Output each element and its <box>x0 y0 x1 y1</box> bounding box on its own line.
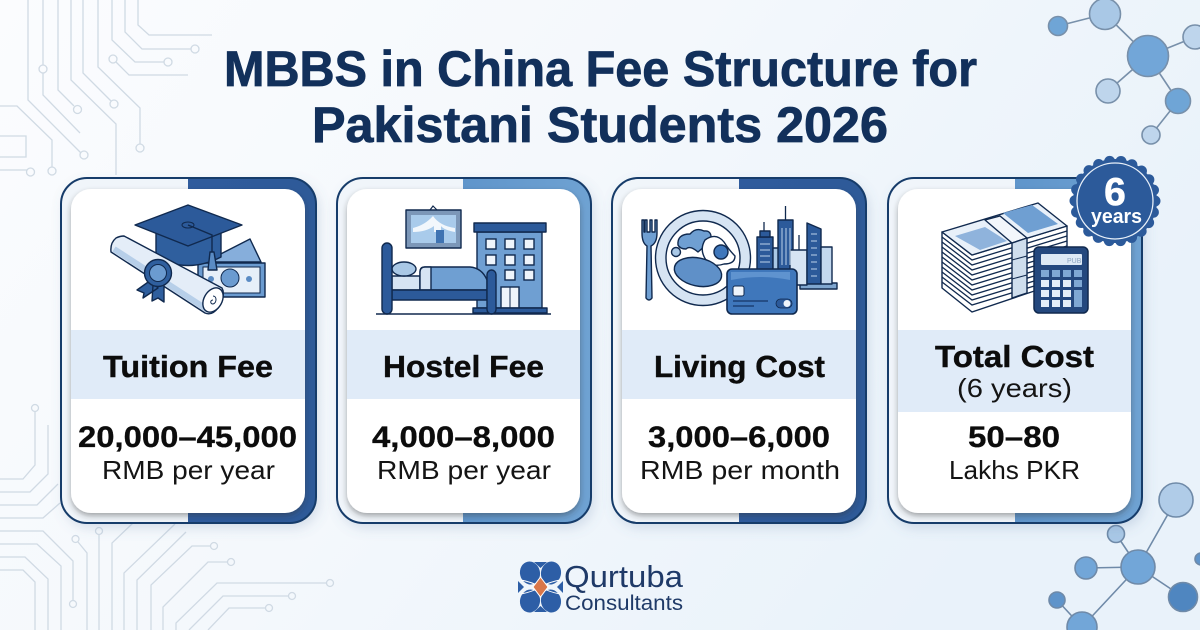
amount: tuition fee: 20,000–45,000 <box>78 421 297 454</box>
unit: total cost: Lakhs PKR <box>949 455 1080 485</box>
icon: graduation cap, diploma and money <box>111 205 265 316</box>
badge: 6 years: years <box>1091 206 1142 228</box>
amount: hostel fee: 4,000–8,000 <box>372 421 555 454</box>
molecule network: top right <box>1048 0 1200 144</box>
logo: Qurtuba Consultants <box>518 559 684 615</box>
icon: banknote stack and calculator: PUB <box>1067 258 1082 265</box>
icon: bed, picture and building <box>376 206 551 314</box>
icon: banknote stack and calculator <box>942 203 1088 313</box>
title <box>224 41 977 153</box>
panel: tuition fee <box>61 178 316 523</box>
band: total cost <box>898 330 1131 412</box>
wordmark: Qurtuba: Qurtuba <box>564 559 684 594</box>
label: tuition fee: Tuition Fee <box>103 349 273 384</box>
amount: living cost: 3,000–6,000 <box>648 421 830 454</box>
panel: hostel fee <box>337 178 591 523</box>
title: Pakistani Students 2026 <box>312 97 888 153</box>
band: tuition fee <box>71 330 305 399</box>
badge: 6 years <box>1073 159 1157 243</box>
label: total cost: Total Cost <box>935 339 1094 374</box>
label: living cost: Living Cost <box>654 349 825 384</box>
badge: 6 years: 6 <box>1104 171 1126 214</box>
band: hostel fee <box>347 330 580 399</box>
panel: living cost <box>612 178 866 523</box>
icon: plate, fork, city and bank card <box>642 206 837 314</box>
unit: hostel fee: RMB per year <box>377 455 551 485</box>
icon: logo mark <box>518 560 563 614</box>
amount: total cost: 50–80 <box>968 421 1060 454</box>
wordmark: Consultants: Consultants <box>565 592 683 615</box>
title: MBBS in China Fee Structure for <box>224 41 977 97</box>
circuit pattern: top left <box>0 0 212 176</box>
unit: living cost: RMB per month <box>640 455 840 485</box>
circuit pattern: bottom left <box>0 404 334 630</box>
panel: total cost <box>888 178 1142 523</box>
sub-label: six years: (6 years) <box>957 373 1072 403</box>
label: hostel fee: Hostel Fee <box>383 349 544 384</box>
unit: tuition fee: RMB per year <box>102 455 275 485</box>
molecule network: bottom right <box>1049 483 1200 630</box>
band: living cost <box>622 330 856 399</box>
